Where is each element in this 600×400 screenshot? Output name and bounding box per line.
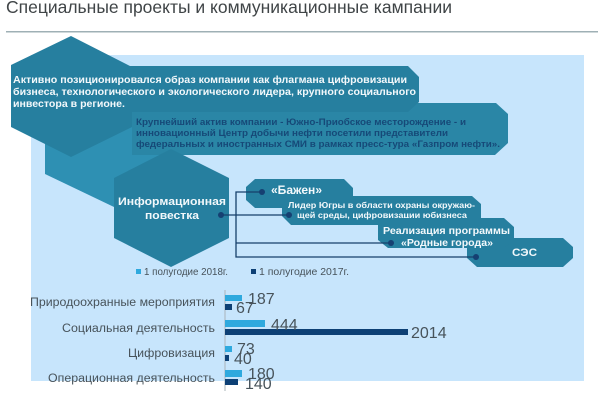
bar values bbox=[234, 291, 447, 393]
band: Bazhen: «Бажен» bbox=[271, 185, 322, 197]
band: Bazhen bbox=[246, 179, 353, 208]
text: first message: Активно позиционировался образ компании как флагмана цифровизации bbox=[13, 75, 407, 86]
bars: first half 2017 bbox=[225, 304, 408, 385]
category labels: Операционная деятельность bbox=[48, 373, 215, 385]
legend bbox=[136, 266, 349, 278]
text: second message: Крупнейший актив компании - Южно-Приобское месторождение - и bbox=[136, 117, 466, 128]
panel: second message bbox=[45, 100, 508, 207]
hexagon and band: first message bbox=[11, 36, 419, 157]
panel: background bbox=[31, 55, 584, 381]
bar values: 187 bbox=[248, 291, 275, 308]
band: Native cities bbox=[378, 218, 514, 249]
hexagon: information agenda bbox=[114, 149, 229, 267]
band: Native cities: Реализация программы bbox=[383, 225, 510, 237]
bar values: 67 bbox=[236, 300, 254, 317]
text: second message: инновационный Центр добычи нефти посетили представители bbox=[136, 128, 448, 139]
text: first message: бизнеса, технологического и экологического лидера, крупного социального bbox=[13, 87, 416, 98]
category labels: Природоохранные мероприятия bbox=[30, 297, 215, 309]
legend: 1 полугодие 2017г. bbox=[259, 266, 349, 278]
band: SES bbox=[467, 238, 573, 267]
band: SES: СЭС bbox=[512, 247, 537, 259]
text: first message bbox=[13, 75, 416, 110]
hexagon: second message bbox=[45, 100, 176, 207]
connector dots bbox=[218, 189, 479, 260]
bar chart bbox=[30, 290, 447, 393]
chart axis bbox=[224, 290, 226, 391]
bar values: 180 bbox=[248, 366, 275, 383]
band: Yugra leader: щей среды, цифровизации юбизнеса bbox=[297, 210, 467, 220]
text: second message bbox=[136, 117, 500, 150]
category labels: Цифровизация bbox=[128, 348, 215, 360]
band: Yugra leader bbox=[282, 196, 481, 225]
band: Native cities: «Родные города» bbox=[401, 237, 493, 249]
bars: first half 2018 bbox=[225, 295, 265, 377]
band: Yugra leader: Лидер Югры в области охраны окружаю- bbox=[288, 200, 475, 210]
legend: 1 полугодие 2018г. bbox=[144, 266, 228, 278]
category labels: Социальная деятельность bbox=[62, 323, 215, 335]
panel: first message bbox=[11, 36, 419, 157]
hexagon: information agenda: повестка bbox=[145, 210, 200, 222]
text: first message: инвестора в регионе. bbox=[13, 99, 125, 110]
category labels bbox=[30, 297, 215, 385]
bar values: 140 bbox=[245, 376, 272, 393]
text: second message: федеральных и иностранных СМИ в рамках пресс-тура «Газпром нефти». bbox=[136, 139, 500, 150]
title rule bbox=[6, 31, 598, 32]
hexagon: information agenda: Информационная bbox=[118, 196, 226, 208]
bar values: 2014 bbox=[411, 325, 447, 342]
bar values: 40 bbox=[234, 351, 252, 368]
connectors bbox=[221, 192, 476, 257]
bar values: 73 bbox=[237, 341, 255, 358]
band: second message bbox=[132, 103, 508, 155]
bar values: 444 bbox=[271, 317, 298, 334]
